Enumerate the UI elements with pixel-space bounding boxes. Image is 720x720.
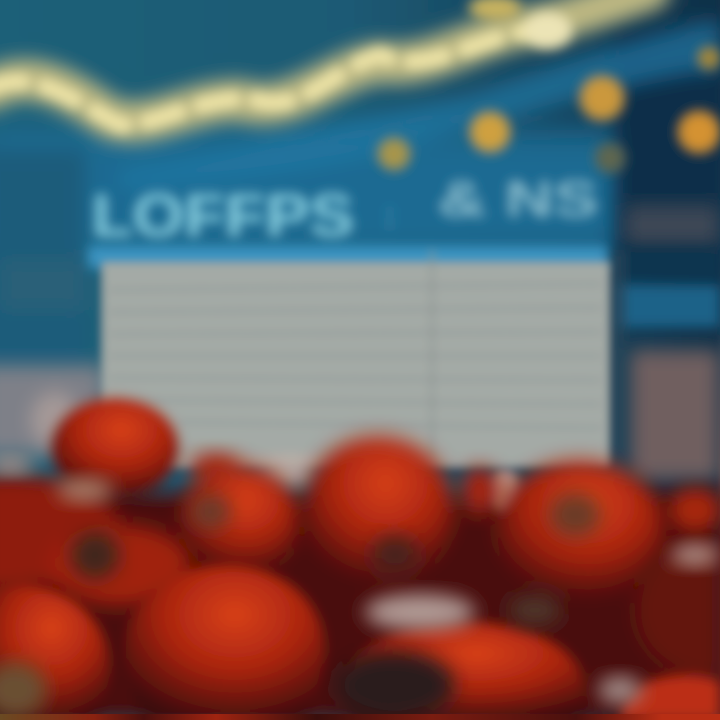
tomato bbox=[345, 622, 585, 720]
tomato bbox=[125, 565, 325, 720]
wavy string of yellow light bbox=[0, 0, 650, 125]
blurred heading: LOFFPS bbox=[92, 182, 354, 249]
bottom edge strip bbox=[0, 714, 720, 720]
tomato bbox=[302, 436, 454, 584]
blurred heading: & NS bbox=[438, 171, 598, 227]
tomato bbox=[620, 675, 720, 720]
blue glow under the light band bbox=[120, 20, 720, 190]
dark base bbox=[0, 480, 720, 720]
tomato bbox=[0, 477, 120, 590]
blurred heading bbox=[92, 171, 598, 249]
calyx shadows and highlights bbox=[190, 494, 230, 530]
blurred heading: : bbox=[384, 196, 395, 234]
pale highlights between tomatoes bbox=[31, 392, 79, 448]
tomato bbox=[51, 398, 179, 498]
small red tomatoes in the gaps bbox=[462, 466, 498, 514]
tomato bbox=[50, 525, 190, 605]
bright blue rule above panel bbox=[88, 246, 608, 268]
glowing orange lights bbox=[378, 47, 720, 173]
tomato pile bbox=[0, 392, 720, 720]
tomato bbox=[0, 585, 110, 720]
tomato bbox=[180, 465, 300, 575]
side panel, right bbox=[612, 205, 720, 480]
central gray text panel bbox=[102, 250, 626, 480]
tomato bbox=[635, 540, 720, 680]
tomato bbox=[496, 460, 664, 600]
